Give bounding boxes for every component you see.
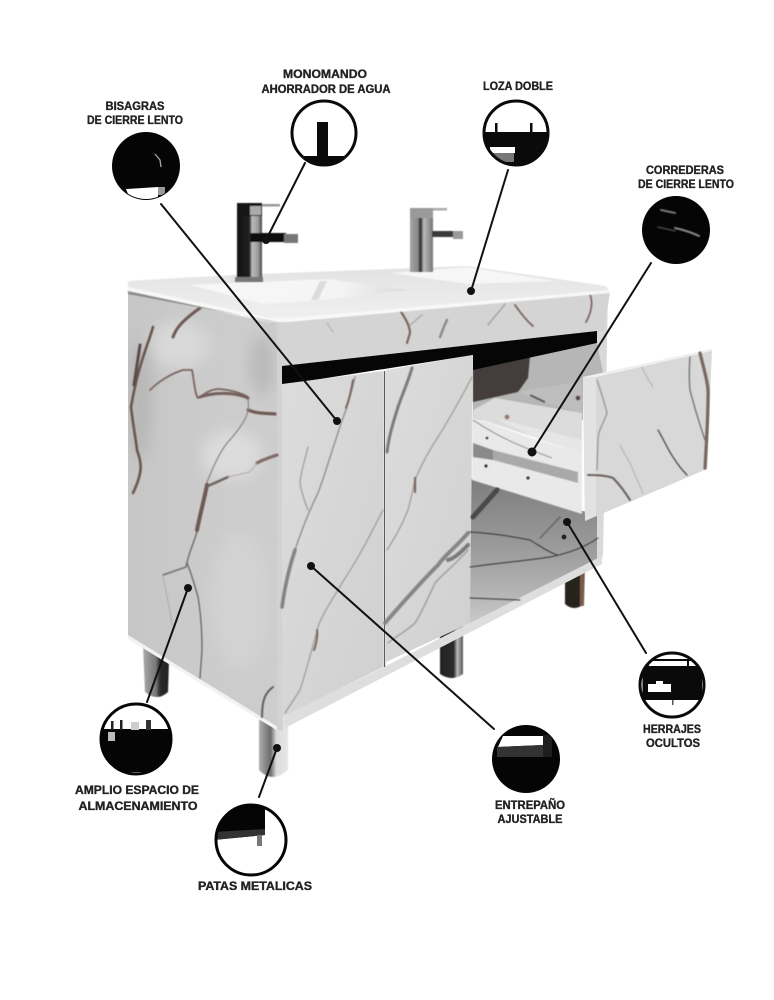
- drawer box: [472, 381, 582, 514]
- label: HERRAJES: [643, 724, 701, 736]
- icon: shelf detail: [492, 725, 560, 793]
- label: PATAS METALICAS: [198, 881, 312, 893]
- icon: double basin detail: [483, 100, 551, 168]
- lower shelf veins: [470, 490, 598, 600]
- icon: faucet detail: [288, 100, 360, 168]
- drawer front: [583, 349, 712, 521]
- drawer rear panel: [517, 381, 582, 413]
- line: patas: [259, 745, 280, 797]
- faucet left: [235, 203, 298, 282]
- label: LOZA DOBLE: [483, 81, 553, 93]
- callout: amplio espacio: [75, 703, 199, 813]
- door right: [386, 355, 473, 662]
- label: CORREDERAS: [646, 165, 724, 177]
- upper interior dark marble: [473, 356, 530, 402]
- callout: amplio espacio: ALMACENAMIENTO: [78, 801, 198, 813]
- line: entrepano: [308, 563, 494, 729]
- label: AMPLIO ESPACIO DE: [75, 785, 199, 797]
- icon: hardware detail: [638, 652, 708, 718]
- front apron: [280, 292, 610, 368]
- legs: [143, 555, 585, 777]
- drawer side: [472, 417, 582, 514]
- callout: herrajes: OCULTOS: [646, 738, 700, 750]
- line: monomando: [263, 163, 305, 243]
- right side edge panel: [597, 290, 608, 565]
- upper interior: [473, 343, 604, 420]
- black band: [282, 331, 597, 385]
- callout: correderas: [638, 165, 734, 264]
- label: MONOMANDO: [283, 69, 367, 81]
- callout: entrepano: AJUSTABLE: [498, 814, 563, 826]
- line: bisagras: [161, 204, 340, 424]
- callout: loza doble: [483, 81, 553, 168]
- callout: patas metalicas: [198, 800, 312, 893]
- callout: bisagras: DE CIERRE LENTO: [87, 115, 183, 127]
- drawer slide: [473, 443, 578, 483]
- label: BISAGRAS: [106, 101, 165, 113]
- callout: correderas: DE CIERRE LENTO: [638, 179, 734, 191]
- line: correderas: [528, 263, 651, 456]
- front corner strip: [277, 322, 283, 730]
- callout lines: [147, 163, 651, 797]
- side panel: [128, 293, 280, 730]
- bottom plinth: [283, 556, 602, 728]
- line: loza doble: [468, 170, 508, 294]
- callout: entrepano: [492, 725, 565, 826]
- icon: slide detail: [642, 196, 710, 264]
- label: ENTREPAÑO: [495, 799, 565, 812]
- callout: herrajes: [638, 652, 708, 750]
- icon: storage detail: [98, 703, 174, 779]
- drawer front veins: [588, 353, 708, 500]
- faucet right: [410, 208, 463, 272]
- line: herrajes: [564, 519, 646, 653]
- callout: monomando: [262, 69, 390, 168]
- side panel soft marble tones: [128, 323, 276, 480]
- drawer interior: [473, 398, 582, 453]
- open lower compartment: [470, 478, 602, 630]
- door seam: [384, 371, 386, 667]
- line: amplio espacio: [147, 585, 191, 702]
- door left: [282, 371, 383, 717]
- callout: bisagras: [87, 101, 183, 200]
- marble veins: [131, 294, 592, 717]
- callout: monomando: AHORRADOR DE AGUA: [262, 84, 390, 96]
- icon: hinge detail: [112, 132, 180, 200]
- icon: leg detail: [214, 800, 287, 876]
- side bottom highlight: [128, 635, 278, 731]
- vanity cabinet: [128, 203, 712, 777]
- countertop with basins: [128, 266, 610, 322]
